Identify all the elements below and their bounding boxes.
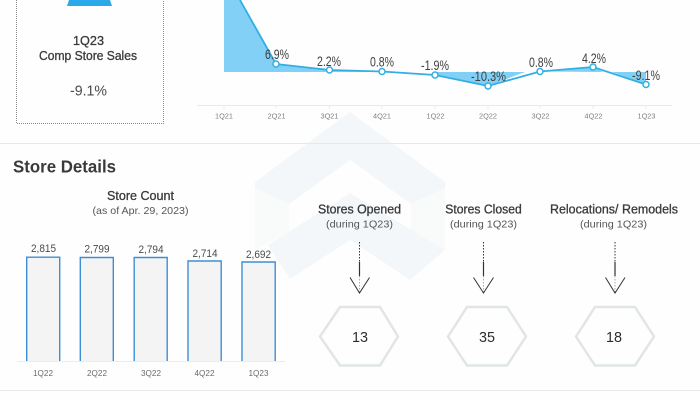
data labels: -1.9%: [421, 57, 449, 73]
bar labels: [33, 368, 269, 378]
area fill 1Q23: [612, 72, 646, 84]
area fill 3Q22 to 4Q22: [540, 67, 603, 72]
panel: relocations and remodels: [550, 202, 678, 366]
axis labels: 3Q21: [320, 112, 338, 120]
bar labels: 3Q22: [141, 368, 161, 378]
data labels: -9.1%: [632, 67, 660, 83]
data labels: -10.3%: [471, 68, 506, 84]
data labels: 4.2%: [582, 50, 606, 66]
chart axis: [197, 105, 672, 109]
bar values: 2,799: [84, 244, 110, 256]
bar labels: 1Q23: [248, 368, 269, 378]
hexagon value: [448, 307, 526, 366]
arrow: [474, 242, 494, 293]
chart area fill: [224, 0, 392, 72]
bar labels: 2Q22: [87, 368, 107, 378]
subtitle: (during 1Q23): [580, 218, 647, 230]
bar values: 2,794: [138, 244, 164, 256]
data labels: 2.2%: [317, 53, 341, 69]
bar values: 2,692: [246, 249, 271, 261]
heading: store details: Store Details: [13, 156, 116, 176]
axis labels: 1Q21: [215, 112, 233, 120]
store count subtitle: (as of Apr. 29, 2023): [92, 205, 188, 217]
negative area fills: [420, 72, 525, 86]
arrow: [606, 242, 625, 293]
axis labels: 1Q23: [638, 112, 656, 120]
callout box: [16, 0, 164, 124]
data labels: 6.9%: [265, 46, 289, 62]
data point markers: [273, 61, 649, 89]
arrow: [350, 242, 370, 293]
axis labels: 4Q22: [584, 112, 602, 120]
title: Stores Opened: [318, 202, 401, 216]
bar labels: 1Q22: [33, 368, 53, 378]
line chart: comp store sales by quarter: [197, 0, 672, 120]
hexagon value: 13: [352, 329, 368, 346]
axis labels: 4Q21: [373, 112, 391, 120]
hexagon value: [576, 307, 654, 366]
bars: [27, 257, 275, 361]
subtitle: (during 1Q23): [326, 218, 393, 230]
callout heading: 1Q23: [73, 34, 104, 48]
panel: store count: [17, 189, 285, 378]
bar values: 2,815: [31, 243, 56, 255]
panel: comp store sales callout: [16, 0, 164, 124]
bar values: [31, 243, 271, 261]
panel: stores opened: [318, 202, 401, 366]
axis labels: 1Q22: [426, 112, 444, 120]
title: Relocations/ Remodels: [550, 202, 678, 216]
subtitle: (during 1Q23): [450, 218, 517, 230]
chart line: [240, 0, 646, 86]
hexagon value: 35: [479, 329, 495, 346]
axis labels: 2Q22: [479, 112, 497, 120]
store count title: Store Count: [107, 189, 175, 203]
watermark logo: [255, 112, 445, 280]
axis labels: 2Q21: [268, 112, 286, 120]
axis labels: 3Q22: [532, 112, 550, 120]
axis labels: [215, 112, 656, 120]
title: Stores Closed: [445, 202, 522, 216]
data labels: 0.8%: [529, 54, 553, 70]
hexagon value: 18: [606, 329, 622, 346]
hexagon value: [320, 307, 398, 366]
bar chart axis: [17, 360, 285, 362]
bar values: 2,714: [192, 248, 218, 260]
bar chart: [17, 243, 285, 378]
panel: stores closed: [445, 202, 526, 366]
callout subheading: Comp Store Sales: [39, 49, 137, 63]
data labels: [265, 46, 660, 84]
data labels: 0.8%: [370, 54, 394, 70]
icon: blue base: [67, 0, 112, 6]
bar labels: 4Q22: [194, 368, 215, 378]
callout value: -9.1%: [70, 82, 107, 100]
